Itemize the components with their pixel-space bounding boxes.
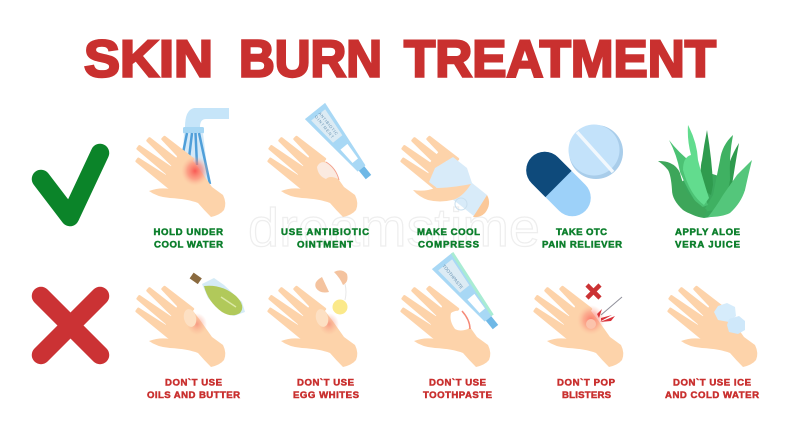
label: OILS AND BUTTER <box>147 390 240 401</box>
icon: hand with toothpaste smear <box>402 287 490 367</box>
label: TAKE OTC <box>556 227 607 238</box>
label <box>557 378 616 401</box>
icon: toothpaste tube <box>432 253 506 335</box>
label: AND COLD WATER <box>665 390 759 401</box>
panel: no ice <box>665 287 759 401</box>
watermark: dreamstime <box>248 198 540 258</box>
label: OINTMENT <box>297 240 353 250</box>
label: DON`T USE <box>429 378 487 388</box>
icon: small red cross <box>587 285 600 298</box>
label: BLISTERS <box>562 390 612 401</box>
icon: hand with ointment <box>269 137 357 217</box>
icon: needle and burst <box>597 297 622 322</box>
label: APPLY ALOE <box>675 227 741 238</box>
label <box>417 227 480 250</box>
panel: antibiotic ointment <box>269 103 379 250</box>
icon: ointment tube: OINTMENT <box>314 114 335 139</box>
icon: hand with blister <box>535 287 623 367</box>
label: DON`T USE <box>297 378 355 388</box>
label: DON`T USE <box>165 378 223 388</box>
label: DON`T POP <box>557 378 616 388</box>
icon: aloe plant <box>658 125 752 218</box>
icon: hand <box>669 287 757 367</box>
label <box>665 378 759 401</box>
label: HOLD UNDER <box>154 227 223 238</box>
icon: oil bottle <box>190 273 245 316</box>
icon: ointment tube: ANTIBIOTIC <box>318 111 339 136</box>
icon: green check mark <box>41 153 100 217</box>
label: DON`T USE ICE <box>673 378 752 388</box>
icon: toothpaste tube: TOOTHPASTE <box>441 263 464 290</box>
panel: no egg whites <box>269 270 360 401</box>
icon: ointment tube <box>305 103 379 185</box>
label: TOOTHPASTE <box>423 390 493 401</box>
icon: capsule <box>519 144 598 224</box>
panel: no toothpaste <box>402 253 506 401</box>
icon: hand with compress bandage <box>402 137 489 217</box>
panel: hold under cool water <box>137 108 229 250</box>
panel: cool compress <box>402 137 489 250</box>
label: EGG WHITES <box>293 390 360 401</box>
icon: tablet <box>568 124 623 179</box>
label <box>281 227 369 250</box>
panel: pain reliever <box>519 124 623 250</box>
label: VERA JUICE <box>675 240 741 250</box>
label <box>675 227 741 250</box>
label: PAIN RELIEVER <box>542 240 622 250</box>
icon: hand with burn <box>137 137 225 217</box>
label: USE ANTIBIOTIC <box>281 227 369 238</box>
label <box>293 378 360 401</box>
label <box>147 378 240 401</box>
label: MAKE COOL <box>417 227 480 238</box>
title <box>84 30 716 88</box>
title: TREATMENT <box>404 30 716 88</box>
icon: faucet <box>183 108 229 134</box>
panel: aloe vera <box>658 125 752 250</box>
icon: ice cubes <box>714 303 745 334</box>
icon: water stream <box>183 133 210 184</box>
label: COOL WATER <box>154 240 223 250</box>
icon: egg shells and yolk <box>315 270 348 314</box>
title: BURN <box>239 30 382 88</box>
label <box>154 227 223 250</box>
icon: hand with burn <box>137 287 225 367</box>
panel: no oils and butter <box>137 273 245 401</box>
label <box>542 227 622 250</box>
panel: no popping blisters <box>535 285 623 401</box>
icon: hand with burn <box>269 287 357 367</box>
label <box>423 378 493 401</box>
label: COMPRESS <box>418 240 480 250</box>
title: SKIN <box>84 30 213 88</box>
icon: red cross <box>41 296 100 355</box>
